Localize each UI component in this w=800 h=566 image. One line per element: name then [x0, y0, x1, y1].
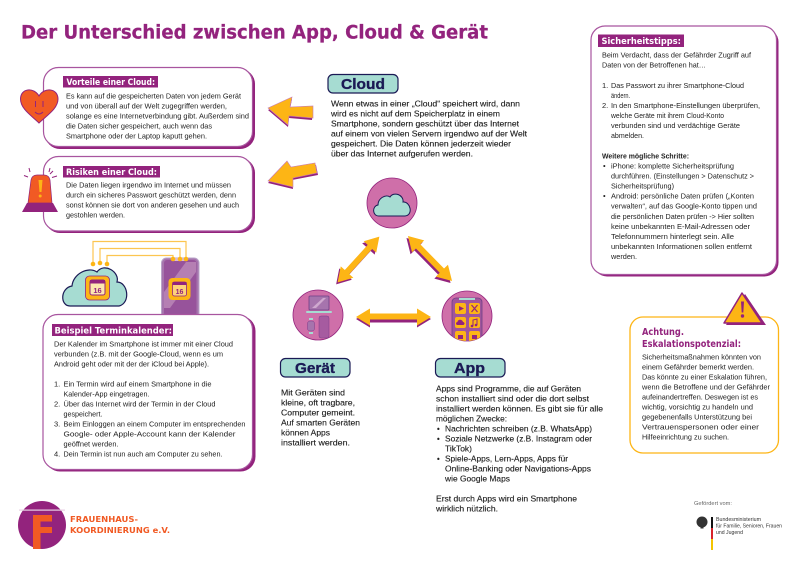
arrow: device to app	[356, 308, 431, 328]
body text: 2.	[54, 400, 60, 408]
panel: Risiken einer Cloud	[44, 156, 255, 233]
body text: •	[603, 162, 606, 170]
text: Cloud explanation: wird es nicht auf dem Speicherplatz in einem	[330, 110, 500, 118]
body text: gestohlen werden.	[66, 210, 125, 220]
arrow: Risiken to Cloud	[268, 161, 318, 189]
arrow: device to cloud	[330, 231, 386, 290]
heading bar: Sicherheitstipps:	[602, 37, 681, 47]
text: App explanation: möglichen Zwecke:	[436, 414, 507, 424]
heading pill: Gerät	[280, 358, 350, 377]
body text: solange es eine Internetverbindung gibt. Außerdem sind	[66, 112, 249, 120]
logo: Frauenhaus-Koordinierung: KOORDINIERUNG e.V.	[70, 526, 170, 535]
text: App explanation: wirklich nützlich.	[435, 504, 498, 514]
body text: ändern.	[611, 91, 630, 100]
text: App explanation: Apps sind Programme, die auf Geräten	[436, 384, 581, 394]
text: App explanation: Online-Banking oder Navigations-Apps	[445, 464, 591, 474]
body text: Telefonnummern hinterlegt sein. Alle	[611, 232, 734, 241]
body text	[66, 180, 239, 220]
heading bar: Risiken einer Cloud:	[66, 168, 157, 178]
text: App explanation: •	[437, 454, 440, 464]
body text: Google- oder Apple-Account kann der Kalender	[64, 430, 236, 438]
icon: cloud circle	[367, 178, 417, 228]
text: App explanation: Spiele-Apps, Lern-Apps, Apps für	[445, 454, 568, 464]
icon: teal cloud	[63, 268, 127, 306]
body text: wenn die Betroffene und der Gefährder	[641, 382, 770, 392]
body text: Es kann auf die gespeicherten Daten von jedem Gerät	[66, 92, 242, 100]
text: App explanation: TikTok)	[445, 444, 472, 454]
body text	[66, 92, 249, 140]
text: App explanation: •	[437, 434, 440, 444]
body text: verbunden (z.B. mit der Google-Cloud, wenn es um	[54, 350, 223, 358]
text: Gerät explanation: Mit Geräten sind	[281, 388, 345, 398]
logo: Frauenhaus-Koordinierung	[18, 501, 170, 549]
body text: durchführen. (Einstellungen > Datenschutz >	[611, 172, 755, 180]
body text: welche Geräte mit ihrem Cloud-Konto	[610, 111, 724, 120]
body text: unbekannten Informationen sollen entfernt	[611, 242, 753, 251]
panel: Beispiel Terminkalender	[43, 314, 256, 472]
body text	[54, 340, 246, 458]
icon: cloud calendar: 16	[93, 286, 102, 295]
body text: aufeinandertreffen. Deswegen ist es	[642, 392, 758, 402]
body text: 1.	[602, 81, 608, 90]
body text: Ein Termin wird auf einem Smartphone in die	[64, 380, 212, 388]
text: App explanation: Soziale Netzwerke (z.B. Instagram oder	[445, 434, 592, 444]
body text: keine unbekannten E-Mail-Adressen oder	[611, 222, 751, 231]
heading: Achtung.	[642, 327, 684, 338]
panel: Achtung Eskalationspotenzial	[630, 317, 778, 453]
text: Cloud explanation: über das Internet aufgerufen werden.	[331, 150, 473, 158]
logo: Gefördert vom Bundesministerium: und Jugend	[716, 530, 743, 536]
text: Cloud explanation: gespeichert. Die Daten können jederzeit wieder	[331, 140, 511, 148]
body text: Daten von der Betroffenen hat…	[602, 60, 706, 70]
icon: smiling heart	[20, 90, 58, 123]
heading pill: App: App	[454, 360, 485, 377]
heading pill: App	[436, 358, 505, 377]
body text: verbunden sind und verdächtige Geräte	[611, 121, 740, 130]
text: Cloud explanation: Smartphone, sondern geschützt über das Internet	[331, 120, 520, 128]
body text: wichtig, vorsichtig zu handeln und	[641, 402, 753, 412]
body text: und von überall auf der Welt zugegriffen werden,	[66, 102, 227, 110]
icon: apps circle	[442, 291, 492, 348]
body text: verwalten“, auf das Google-Konto tippen und	[611, 202, 757, 210]
body text: Weitere mögliche Schritte:	[602, 152, 689, 160]
heading: Eskalationspotenzial:	[642, 339, 741, 350]
text: App explanation	[435, 384, 603, 514]
body text: Über das Internet wird der Termin in der Cloud	[64, 400, 216, 408]
body text: abmelden.	[611, 131, 644, 140]
body text: Der Kalender im Smartphone ist immer mit einer Cloud	[54, 340, 233, 348]
body text: Die Daten liegen irgendwo im Internet und müssen	[66, 180, 231, 190]
body text: Das könnte zu einer Eskalation führen,	[642, 372, 767, 382]
logo: Gefördert vom Bundesministerium	[694, 501, 782, 550]
heading bar: Beispiel Terminkalender:	[54, 326, 172, 336]
text: Gerät explanation: Computer gemeint.	[281, 408, 355, 418]
body text: Beim Verdacht, dass der Gefährder Zugriff auf	[602, 50, 752, 60]
body text: sonst können sie dort von anderen gesehen und auch	[66, 200, 239, 210]
body text: iPhone: komplette Sicherheitsprüfung	[611, 162, 734, 170]
text: Gerät explanation: können Apps	[281, 428, 330, 438]
text: Cloud explanation: auf einem von vielen Servern irgendwo auf der Welt	[331, 130, 528, 138]
text: Cloud explanation: Wenn etwas in einer „Cloud“ speichert wird, dann	[331, 100, 520, 108]
text: Gerät explanation: Auf smarten Geräten	[281, 418, 360, 428]
text: Cloud explanation	[330, 100, 528, 158]
body text: einem Gefährder bemerkt werden.	[642, 362, 754, 372]
body text	[641, 352, 770, 442]
body text: gegebenenfalls Unterstützung bei	[642, 412, 752, 422]
panel: Sicherheitstipps	[591, 26, 778, 276]
body text: werden.	[610, 252, 637, 261]
body text: In den Smartphone-Einstellungen überprüfen,	[611, 101, 760, 110]
icon: alarm siren	[22, 168, 58, 212]
icon: warning triangle	[724, 293, 766, 325]
heading pill: Cloud: Cloud	[341, 76, 385, 93]
body text: Android: persönliche Daten prüfen („Konten	[611, 192, 754, 200]
body text: 2.	[602, 101, 608, 110]
text: App explanation: Erst durch Apps wird ein Smartphone	[436, 494, 577, 504]
heading pill: Gerät: Gerät	[295, 360, 335, 377]
icon: devices circle	[293, 290, 343, 340]
body text: •	[603, 192, 606, 200]
text: Gerät explanation: kleine, oft tragbare,	[281, 398, 355, 408]
text: App explanation: •	[437, 424, 440, 434]
text: Gerät explanation	[281, 388, 360, 448]
body text: Hilfeeinrichtung zu suchen.	[642, 432, 729, 442]
body text: Sicherheitsprüfung)	[611, 182, 674, 190]
logo: Frauenhaus-Koordinierung: FRAUENHAUS-	[70, 515, 138, 524]
body text: geöffnet werden.	[64, 440, 118, 448]
text: App explanation: Nachrichten schreiben (z.B. WhatsApp)	[445, 424, 592, 434]
logo: Gefördert vom Bundesministerium: Bundesministerium	[716, 517, 761, 523]
body text: Beim Einloggen an einem Computer im entsprechenden	[64, 420, 246, 428]
icon: connector dots	[91, 257, 188, 266]
body text: gespeichert.	[64, 410, 102, 418]
body text: Das Passwort zu ihrer Smartphone-Cloud	[611, 81, 744, 90]
text: Gerät explanation: installiert werden.	[281, 438, 350, 448]
body text: 4.	[54, 450, 60, 458]
body text: 3.	[54, 420, 60, 428]
body text: Kalender-App eingetragen.	[64, 390, 150, 398]
body text: die Daten sicher gespeichert, auch wenn das	[66, 122, 212, 130]
text: App explanation: wie Google Maps	[444, 474, 510, 484]
body text: Sicherheitsmaßnahmen könnten von	[642, 352, 761, 362]
heading pill: Cloud	[328, 74, 398, 93]
icon: smartphone: 16	[176, 289, 183, 296]
body text: Dein Termin ist nun auch am Computer zu sehen.	[64, 450, 222, 458]
panel: Vorteile einer Cloud	[44, 68, 255, 149]
title: Der Unterschied zwischen App, Cloud & Gerät	[21, 22, 488, 44]
body text: 1.	[54, 380, 60, 388]
logo: Gefördert vom Bundesministerium: für Familie, Senioren, Frauen	[716, 524, 782, 530]
body text: Android geht oder mit der der iCloud bei Apple).	[54, 360, 209, 368]
heading bar: Vorteile einer Cloud:	[66, 78, 155, 88]
icon: federal eagle	[696, 516, 708, 528]
body text: Vertrauenspersonen oder einer	[642, 422, 760, 432]
icon: connector lines	[93, 242, 186, 264]
text: App explanation: schon installiert sind oder die dort selbst	[436, 394, 590, 404]
arrow: Vorteile to Cloud	[268, 97, 313, 127]
body text: Smartphone oder der Laptop kaputt gehen.	[66, 132, 207, 140]
body text: durch ein sicheres Passwort geschützt werden, denn	[66, 190, 236, 200]
arrow: cloud to app	[400, 230, 458, 289]
illustration: cloud and phone calendar sync	[63, 242, 199, 318]
heading	[642, 327, 741, 350]
logo: Gefördert vom Bundesministerium: Gefördert vom:	[694, 501, 732, 507]
body text	[602, 50, 760, 261]
text: App explanation: installiert werden können. Es gibt sie für alle	[436, 404, 603, 414]
body text: die persönlichen Daten prüfen -> Hier sollten	[611, 212, 754, 221]
